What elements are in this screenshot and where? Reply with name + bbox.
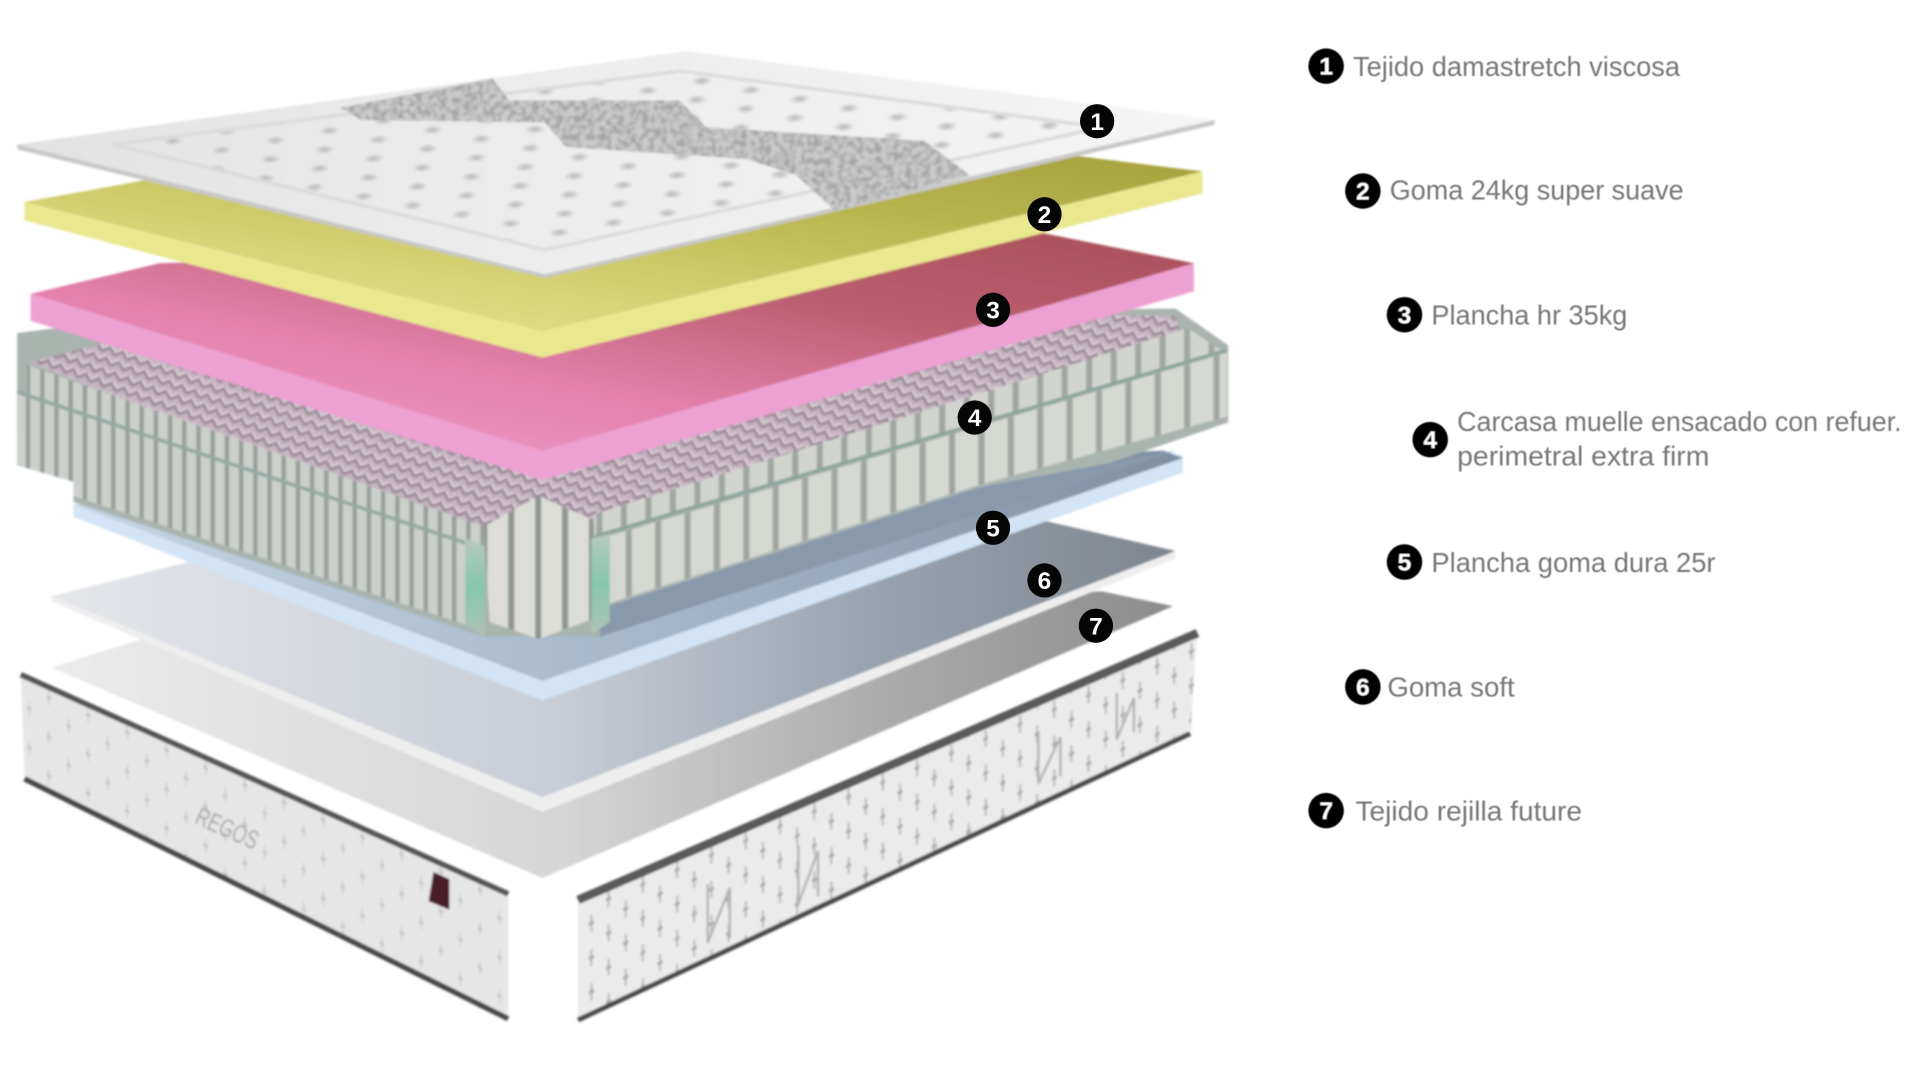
legend item 3: Plancha hr 35kg	[1431, 299, 1627, 330]
legend item 7: 7	[1319, 798, 1333, 825]
teal corner left	[465, 539, 485, 637]
badge 7 on mattress: 7	[1089, 613, 1103, 640]
badge 3 on mattress	[976, 293, 1010, 327]
left upper springs	[17, 394, 484, 602]
legend item 6	[1345, 669, 1515, 705]
badge 5 on mattress	[976, 511, 1010, 545]
panel: right border fabric	[578, 631, 1198, 1022]
badge 6 on mattress	[1027, 563, 1062, 598]
legend item 1: Tejido damastretch viscosa	[1353, 51, 1680, 82]
legend item 3	[1387, 297, 1627, 332]
mattress illustration	[17, 51, 1228, 1022]
red label	[429, 872, 449, 910]
damask band	[340, 78, 970, 211]
corner springs	[484, 496, 594, 639]
legend item 7: Tejido rejilla future	[1356, 795, 1582, 826]
right perimeter rail	[595, 350, 1227, 536]
rear frame	[17, 309, 1228, 637]
badge 6 on mattress: 6	[1038, 568, 1051, 595]
quilted dimples	[113, 71, 1102, 250]
badge 2 on mattress: 2	[1038, 202, 1051, 229]
left perimeter rail	[17, 392, 471, 545]
layer 7: tejido rejilla	[51, 591, 1173, 878]
brand logo on border: REGOS	[191, 803, 263, 855]
legend item 5: 5	[1398, 550, 1411, 577]
badge 3 on mattress: 3	[986, 297, 1000, 324]
legend item 4: perimetral extra firm	[1457, 440, 1709, 471]
right lower springs	[600, 353, 1227, 606]
legend item 2: 2	[1356, 179, 1370, 206]
layer 3: plancha HR pink	[31, 233, 1194, 480]
badge 1 on mattress: 1	[1090, 109, 1104, 136]
layer 2: goma yellow	[24, 153, 1202, 358]
legend item 5: Plancha goma dura 25r	[1431, 547, 1716, 578]
right upper springs	[594, 328, 1224, 536]
badge 4 on mattress	[958, 400, 992, 435]
legend item 4	[1412, 406, 1902, 471]
badge 7 on mattress	[1079, 609, 1113, 643]
layer 1: tejido damastretch quilted	[17, 51, 1215, 278]
left lower springs	[73, 465, 465, 624]
legend item 4: 4	[1423, 427, 1437, 454]
legend item 2: Goma 24kg super suave	[1390, 175, 1684, 206]
badge 2 on mattress	[1027, 197, 1062, 231]
legend item 6: 6	[1356, 675, 1370, 702]
badge 1 on mattress	[1080, 104, 1114, 138]
coil tops	[29, 306, 1188, 534]
legend item 1: 1	[1319, 54, 1333, 81]
badge 4 on mattress: 4	[968, 405, 982, 432]
layer 6: goma soft	[51, 514, 1176, 812]
legend item 3: 3	[1398, 302, 1411, 329]
legend item 4: Carcasa muelle ensacado con refuer.	[1457, 406, 1902, 437]
panel: left border fabric	[21, 673, 508, 1022]
legend	[1308, 48, 1902, 828]
grey plate below right springs	[600, 451, 1176, 637]
legend item 6: Goma soft	[1387, 672, 1515, 703]
badge 5 on mattress: 5	[986, 515, 1000, 542]
teal corner right	[591, 534, 610, 634]
stitched logos	[708, 693, 1134, 943]
layer 4: carcasa muelle ensacado	[17, 306, 1228, 639]
layer 5: plancha goma dura	[73, 451, 1183, 700]
